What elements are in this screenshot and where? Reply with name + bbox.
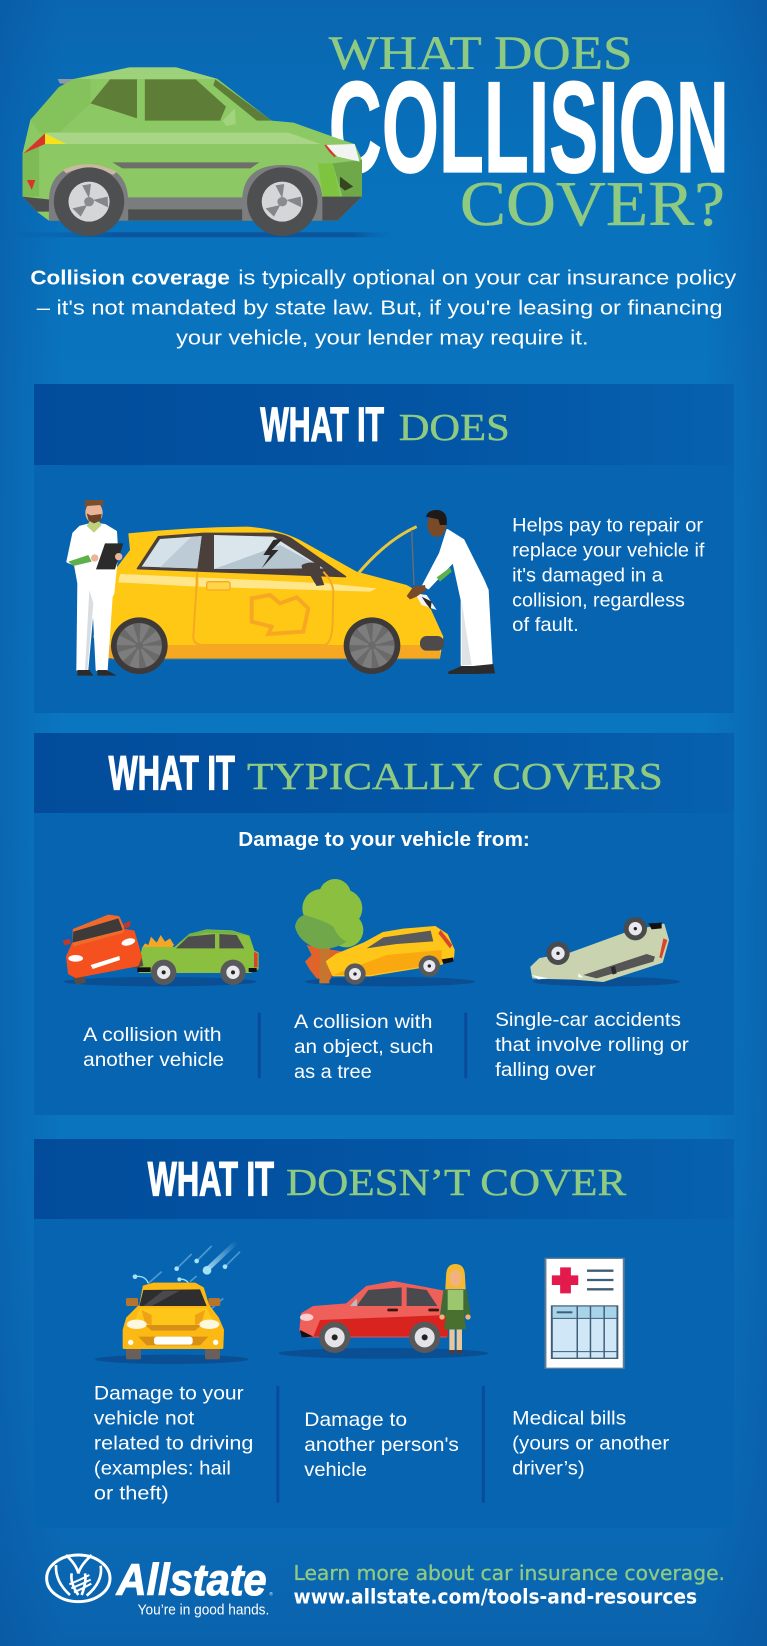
illustration: car hitting a tree <box>295 879 475 986</box>
text: what it does: it's damaged in a <box>512 565 663 586</box>
captions: not covered: another person's <box>304 1434 459 1456</box>
illustration: medical bill <box>545 1258 624 1368</box>
captions: covered events <box>83 1009 689 1083</box>
footer logo: Allstate <box>47 1555 273 1618</box>
footer logo: Allstate: ® <box>269 1591 273 1597</box>
figure: mechanic under hood <box>407 510 495 674</box>
captions: not covered: vehicle not <box>94 1408 194 1429</box>
text: what it does: of fault. <box>512 614 579 636</box>
heading: what it typically covers: TYPICALLY COVERS <box>247 756 663 798</box>
figure: woman <box>439 1264 471 1353</box>
captions: not covered: Medical bills <box>512 1408 626 1429</box>
title: WHAT DOES <box>329 27 633 79</box>
illustration: two cars colliding <box>63 916 258 986</box>
panel: what it doesn't cover <box>34 1139 734 1528</box>
captions: covered events: Single-car accidents <box>495 1009 681 1031</box>
subheading: Damage to your vehicle from: <box>238 828 530 851</box>
captions: not covered: driver’s) <box>512 1458 585 1479</box>
heading: what it does: DOES <box>399 407 510 449</box>
captions: not covered: (examples: hail <box>94 1458 231 1479</box>
footer logo: Allstate: Allstate <box>116 1556 267 1605</box>
text: what it does: collision, regardless <box>512 590 685 611</box>
intro text <box>30 267 736 349</box>
captions: not covered: (yours or another <box>512 1433 669 1454</box>
heading bar <box>34 1139 734 1219</box>
figure: inspector with clipboard <box>67 500 123 676</box>
panel: what it does <box>34 384 734 713</box>
heading: what it doesn't cover: WHAT IT <box>148 1152 274 1206</box>
heading: what it does: WHAT IT <box>260 397 384 451</box>
wheel: rear <box>54 167 124 236</box>
icon: good hands <box>47 1555 110 1602</box>
captions: covered events: A collision with <box>294 1011 432 1033</box>
title <box>329 27 729 239</box>
captions: not covered: vehicle <box>304 1459 367 1481</box>
wheel: front <box>247 167 317 236</box>
captions: not covered: Damage to <box>304 1409 407 1431</box>
captions: covered events: another vehicle <box>83 1049 224 1071</box>
illustration: car in hail <box>95 1242 248 1364</box>
text: what it does <box>512 515 705 636</box>
captions: covered events: that involve rolling or <box>495 1034 689 1056</box>
intro text: Collision coverage <box>30 267 230 289</box>
heading bar <box>34 733 734 813</box>
heading: what it typically covers <box>109 746 663 800</box>
footer call to action <box>294 1562 725 1609</box>
wheel: rear <box>111 617 168 674</box>
captions: covered events: A collision with <box>83 1024 222 1046</box>
captions: not covered <box>94 1383 669 1504</box>
captions: covered events: as a tree <box>294 1061 372 1083</box>
illustration: yellow car with two mechanics <box>67 500 495 676</box>
footer logo: Allstate: You’re in good hands. <box>138 1602 269 1618</box>
captions: covered events: an object, such <box>294 1036 433 1058</box>
panel: what it typically covers <box>34 733 734 1115</box>
captions: not covered: Damage to your <box>94 1383 244 1404</box>
captions: covered events: falling over <box>495 1059 596 1081</box>
heading: what it typically covers: WHAT IT <box>109 746 235 800</box>
illustration: green car <box>0 67 391 237</box>
intro text: your vehicle, your lender may require it. <box>176 327 589 349</box>
heading bar <box>34 384 734 465</box>
heading: what it doesn't cover: DOESN’T COVER <box>286 1162 627 1204</box>
captions: not covered: related to driving <box>94 1433 253 1454</box>
heading: what it doesn't cover <box>148 1152 627 1206</box>
illustration: overturned car <box>532 917 680 986</box>
illustration: red car and woman <box>278 1264 488 1359</box>
wheel: front <box>344 617 400 674</box>
captions: not covered: or theft) <box>94 1483 169 1504</box>
